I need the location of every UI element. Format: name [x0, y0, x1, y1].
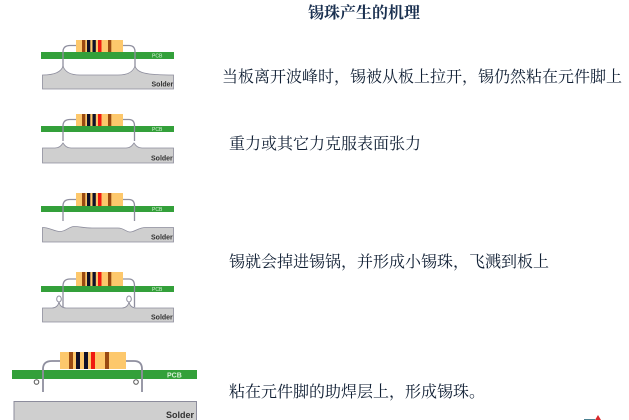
solder bath with ripples: [42, 226, 174, 242]
text: step 1: 当板离开波峰时，锡被从板上拉开，锡仍然粘在元件脚上: [222, 69, 622, 86]
text: step 3: 锡就会掉进锡锅，并形成小锡珠，飞溅到板上: [229, 254, 549, 271]
solder bath with necks: [42, 66, 174, 89]
resistor: [76, 40, 123, 52]
diagram 5: solder balls stuck to flux layer: [12, 352, 197, 420]
corner logo fragment: [584, 415, 601, 420]
diagram 4: solder balls forming: [41, 272, 174, 322]
label solder: Solder: [151, 156, 173, 162]
resistor: [76, 272, 123, 286]
diagram 1: solder pulled from board: [41, 40, 174, 89]
label pcb: PCB: [152, 287, 163, 293]
label solder: Solder: [151, 234, 173, 242]
label pcb: PCB: [152, 127, 163, 133]
resistor: [76, 193, 123, 206]
component leads: [63, 46, 135, 67]
label pcb: PCB: [152, 207, 163, 213]
pcb: [41, 206, 174, 212]
title: 锡珠产生的机理: [308, 5, 420, 22]
label pcb: PCB: [167, 372, 182, 380]
diagram 2: gravity overcomes surface tension: [41, 114, 174, 163]
pcb: [12, 370, 197, 379]
label solder: Solder: [151, 314, 173, 322]
solder bath with necks: [42, 302, 174, 322]
pcb: [41, 52, 174, 59]
solder bath: [14, 402, 196, 420]
component leads: [63, 120, 134, 141]
diagram 3: solder falls back: [41, 193, 174, 242]
component leads: [63, 279, 134, 307]
pcb: [41, 126, 174, 132]
resistor: [76, 114, 123, 126]
label pcb: PCB: [152, 54, 163, 60]
pcb: [41, 286, 174, 292]
resistor: [60, 352, 126, 369]
text: step 2: 重力或其它力克服表面张力: [229, 136, 421, 153]
solder bath with peaks: [42, 143, 174, 163]
label solder: Solder: [166, 410, 195, 420]
text: step 4: 粘在元件脚的助焊层上，形成锡珠。: [229, 384, 485, 401]
forming droplets: [57, 296, 131, 302]
component leads: [63, 200, 134, 221]
component leads: [43, 361, 142, 392]
solder balls: [34, 380, 138, 384]
label solder: Solder: [152, 82, 174, 88]
